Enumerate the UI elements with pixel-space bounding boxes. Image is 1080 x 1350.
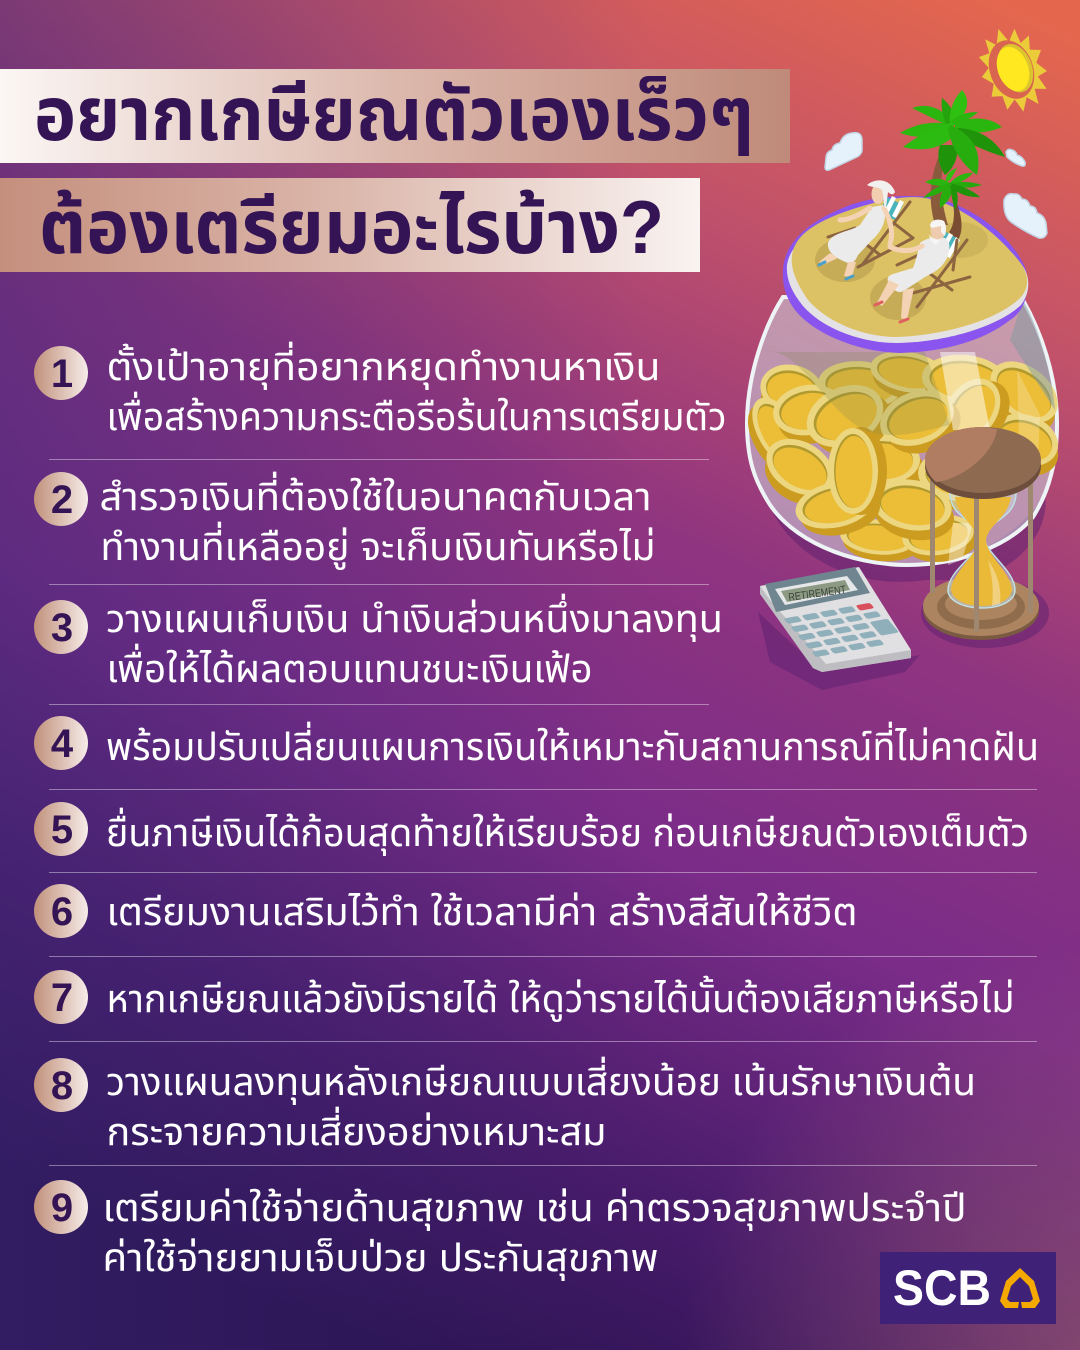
title line 1: อยากเกษียณตัวเองเร็วๆ — [34, 72, 754, 156]
calculator keys — [783, 602, 906, 657]
coins pile — [735, 346, 1072, 567]
step 7 badge: 7 — [51, 976, 73, 1020]
step 9 text — [102, 1188, 966, 1281]
step 4 badge — [34, 716, 88, 770]
step 1 text: เพื่อสร้างความกระตือรือร้นในการเตรียมตัว — [106, 391, 726, 439]
step 2 badge: 2 — [51, 478, 73, 522]
step 3 text: เพื่อให้ได้ผลตอบแทนชนะเงินเฟ้อ — [106, 643, 592, 691]
icon: SCB lotus leaf — [1000, 1268, 1040, 1308]
illustration: retirement jar, hourglass, calculator — [735, 18, 1072, 690]
step 8 text: กระจายความเสี่ยงอย่างเหมาะสม — [106, 1106, 606, 1154]
glass highlights — [765, 300, 1055, 565]
step 4 text: พร้อมปรับเปลี่ยนแผนการเงินให้เหมาะกับสถานการณ์ที่ไม่คาดฝัน — [106, 721, 1039, 769]
SCB logo — [880, 1252, 1056, 1324]
title line 2: ต้องเตรียมอะไรบ้าง? — [39, 185, 664, 269]
step 8 badge — [34, 1058, 88, 1112]
icon: clouds — [825, 133, 1047, 238]
step 2 text — [100, 471, 656, 570]
step 6 text: เตรียมงานเสริมไว้ทำ ใช้เวลามีค่า สร้างสีสันให้ชีวิต — [106, 892, 858, 934]
step 4 badge: 4 — [51, 722, 74, 766]
step 7 text: หากเกษียณแล้วยังมีรายได้ ให้ดูว่ารายได้นั้นต้องเสียภาษีหรือไม่ — [106, 975, 1014, 1022]
figure: man in deck chair — [875, 220, 970, 322]
step 5 badge: 5 — [51, 808, 73, 852]
step 3 text: วางแผนเก็บเงิน นำเงินส่วนหนึ่งมาลงทุน — [106, 593, 723, 642]
step 9 badge — [34, 1180, 88, 1234]
step 9 badge: 9 — [51, 1186, 73, 1230]
step 8 text: วางแผนลงทุนหลังเกษียณแบบเสี่ยงน้อย เน้นรักษาเงินต้น — [106, 1056, 976, 1105]
jar lid and sand island — [783, 196, 1028, 353]
standing coin — [828, 427, 887, 515]
step 3 text — [106, 593, 723, 691]
icon: palm trees — [900, 90, 1005, 240]
step 7 badge — [34, 970, 88, 1024]
step 9 text: ค่าใช้จ่ายยามเจ็บป่วย ประกันสุขภาพ — [102, 1238, 658, 1281]
step 2 badge — [34, 472, 88, 526]
step 1 text — [106, 341, 726, 439]
glass jar shadow — [767, 495, 1046, 582]
step 8 text — [106, 1056, 976, 1154]
glass jar body — [747, 297, 1057, 565]
calculator: RETIREMENT — [788, 584, 847, 604]
step 9 text: เตรียมค่าใช้จ่ายด้านสุขภาพ เช่น ค่าตรวจสุขภาพประจำปี — [102, 1188, 966, 1231]
step 8 badge: 8 — [51, 1064, 73, 1108]
calculator — [758, 567, 920, 690]
step 1 badge: 1 — [51, 352, 73, 396]
step 2 text: ทำงานที่เหลืออยู่ จะเก็บเงินทันหรือไม่ — [100, 521, 656, 570]
step 2 text: สำรวจเงินที่ต้องใช้ในอนาคตกับเวลา — [100, 471, 652, 519]
step 1 badge — [34, 346, 88, 400]
step 5 badge — [34, 802, 88, 856]
step 6 badge: 6 — [51, 890, 73, 934]
step 3 badge — [34, 600, 88, 654]
step 3 badge: 3 — [51, 606, 73, 650]
step 1 text: ตั้งเป้าอายุที่อยากหยุดทำงานหาเงิน — [106, 341, 660, 390]
step 5 text: ยื่นภาษีเงินได้ก้อนสุดท้ายให้เรียบร้อย ก่อนเกษียณตัวเองเต็มตัว — [106, 807, 1029, 856]
step 6 badge — [34, 884, 88, 938]
hourglass — [921, 427, 1049, 648]
icon: sun — [968, 18, 1059, 121]
SCB logo: SCB — [893, 1260, 991, 1316]
figure: woman in deck chair — [819, 180, 913, 279]
